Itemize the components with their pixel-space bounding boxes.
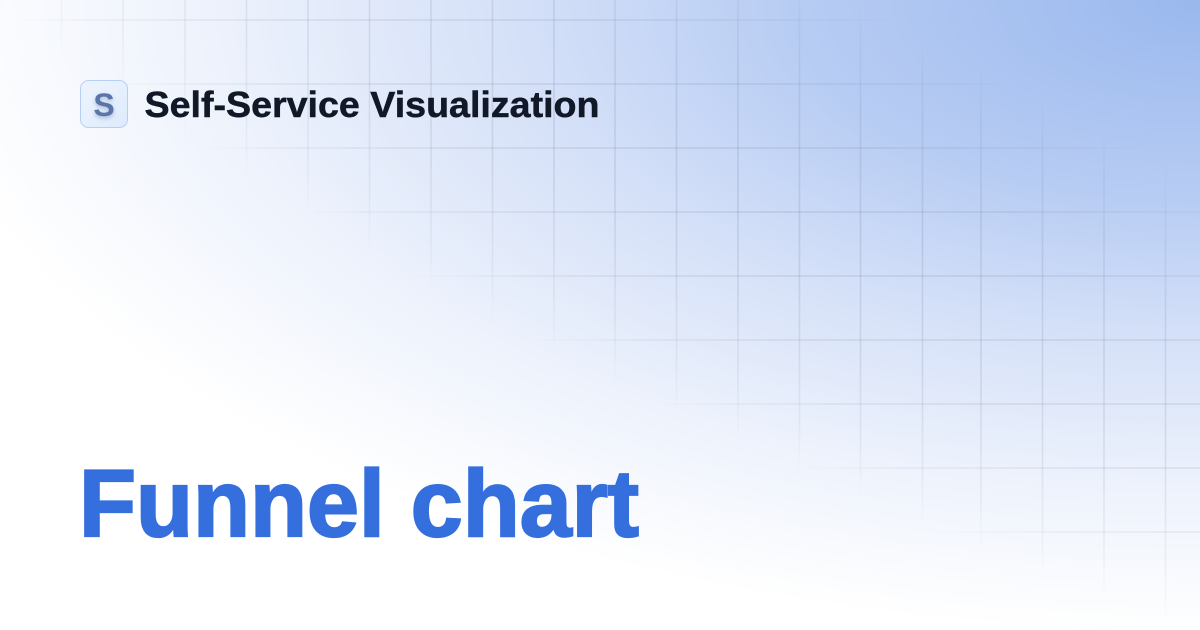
icon: S logo badge: S <box>93 87 115 123</box>
icon: S logo badge <box>80 80 128 128</box>
header: logo and brand name <box>80 80 600 128</box>
title: Funnel chart <box>79 451 639 557</box>
brand name: Self-Service Visualization <box>144 84 600 125</box>
